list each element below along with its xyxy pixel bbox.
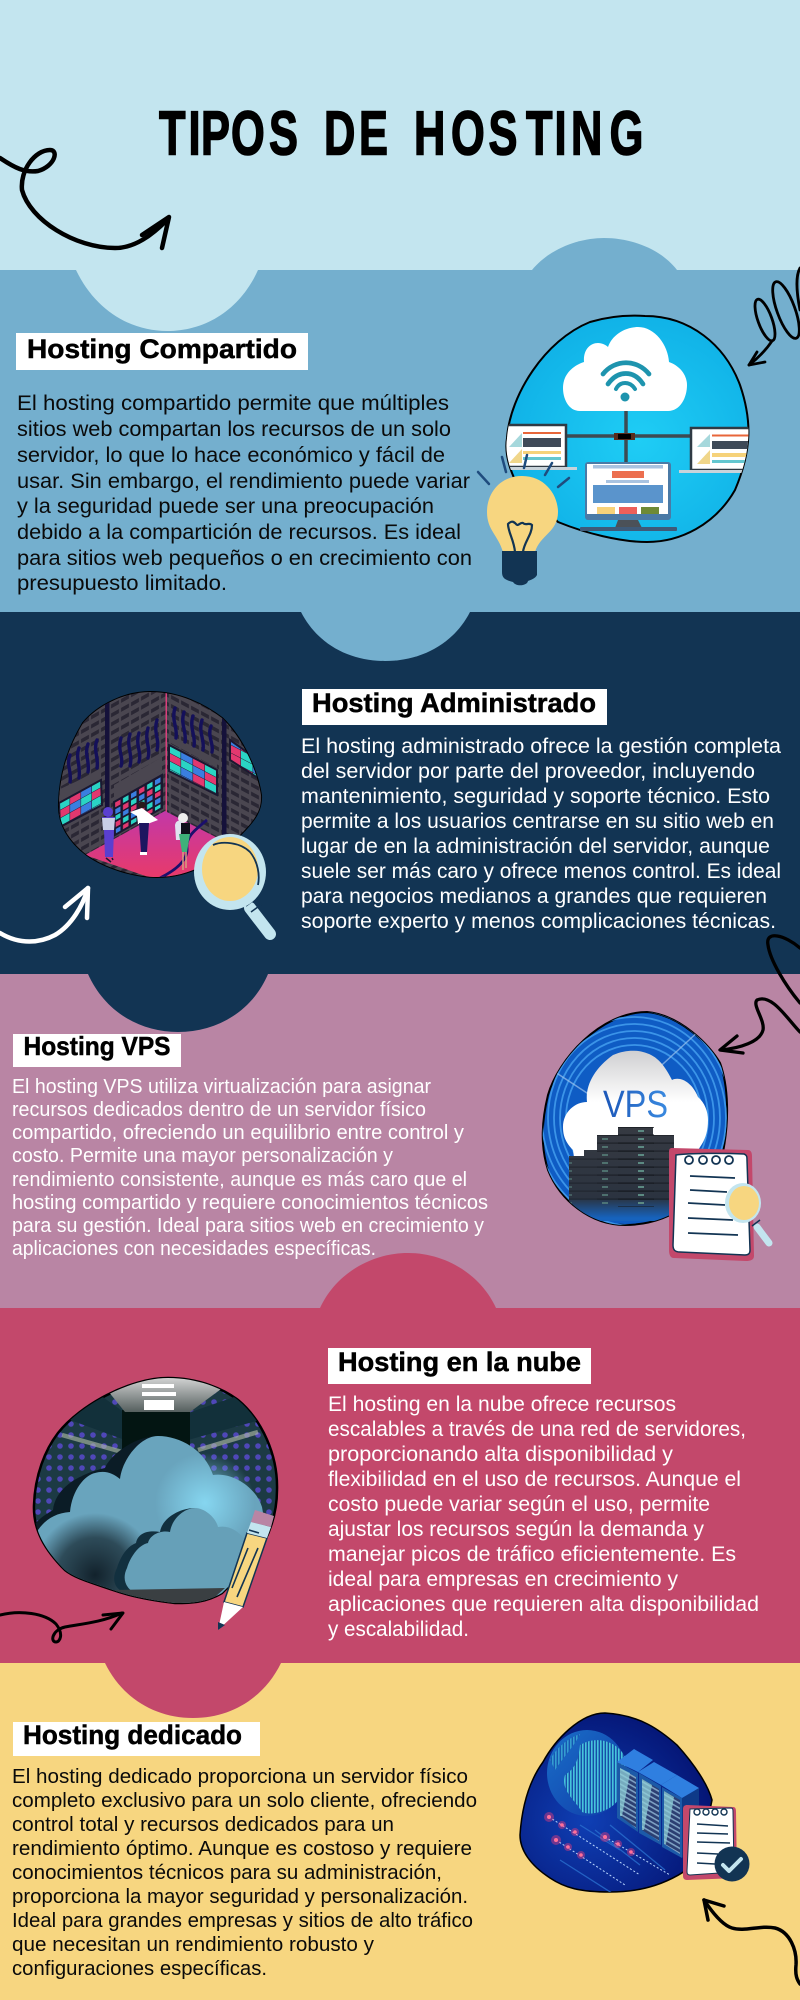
panel: hosting dedicado [12, 1713, 800, 1984]
icon: magnifying glass [194, 834, 270, 934]
text block: hosting administrado: para negocios medianos a grandes que requieren [301, 885, 767, 908]
laptop right [679, 428, 753, 473]
arrow: white curve [0, 888, 88, 942]
text block: hosting en la nube: y escalabilidad. [328, 1618, 469, 1641]
text block: hosting en la nube: ideal para empresas en crecimiento y [328, 1568, 678, 1591]
text block: hosting compartido: servidor, lo que lo hace económico y fácil de [17, 444, 445, 467]
wave bump: rose into yellow [105, 1663, 281, 1718]
monitor [580, 462, 677, 531]
heading: hosting vps: Hosting VPS [24, 1031, 170, 1061]
text block: hosting administrado: lugar de en la administración del servidor, aunque [301, 835, 770, 858]
illustration: globe and servers blob [520, 1713, 712, 1895]
text block: hosting vps: El hosting VPS utiliza virtualización para asignar [12, 1076, 431, 1098]
heading: hosting dedicado: Hosting dedicado [23, 1720, 242, 1750]
people [102, 802, 190, 870]
text block: hosting vps: compartido, ofreciendo un equilibrio entre control y [12, 1122, 464, 1144]
text block: hosting compartido: sitios web compartan los recursos de un solo [17, 418, 451, 441]
icon: notebook and magnifier [669, 1148, 769, 1261]
text block: hosting dedicado: configuraciones específicas. [12, 1957, 267, 1980]
text block: hosting dedicado [12, 1765, 477, 1980]
text block: hosting administrado: El hosting administrado ofrece la gestión completa [301, 735, 781, 758]
arrow: loop squiggle [0, 1613, 123, 1642]
text block: hosting compartido: para sitios web pequeños o en crecimiento con [17, 547, 472, 570]
text block: hosting en la nube: aplicaciones que requieren alta disponibilidad [328, 1593, 759, 1616]
text block: hosting en la nube [328, 1393, 759, 1641]
wave bump: light blue into blue [76, 270, 258, 331]
text block: hosting dedicado: Ideal para grandes empresas y sitios de alto tráfico [12, 1909, 473, 1932]
text block: hosting vps: para su gestión. Ideal para sitios web en crecimiento y [12, 1215, 484, 1237]
text block: hosting en la nube: ajustar los recursos según la demanda y [328, 1518, 704, 1541]
arrow: wavy squiggle to dedicated [704, 1900, 800, 1984]
text block: hosting administrado [301, 735, 781, 933]
illustration: cloud server room blob [28, 1375, 280, 1610]
title: TIPOS DE HOSTING [159, 100, 643, 168]
panel background: navy section [0, 612, 800, 974]
text block: hosting administrado: mantenimiento, seguridad y soporte técnico. Esto [301, 785, 770, 808]
icon: pencil [218, 1510, 274, 1630]
text block: hosting administrado: suele ser más caro y ofrece menos control. Es ideal [301, 860, 781, 883]
text block: hosting compartido: El hosting compartido permite que múltiples [17, 392, 449, 415]
text block: hosting dedicado: control total y recursos dedicados para un [12, 1813, 394, 1836]
wave bump: navy into mauve [88, 974, 268, 1032]
text block: hosting dedicado: rendimiento óptimo. Aunque es costoso y requiere [12, 1837, 472, 1860]
text block: hosting vps: hosting compartido y requiere conocimientos técnicos [12, 1192, 488, 1214]
text block: hosting compartido: debido a la compartición de recursos. Es ideal [17, 521, 461, 544]
text block: hosting dedicado: proporciona la mayor seguridad y personalización. [12, 1885, 468, 1908]
illustration: VPS cloud blob: VPS [603, 1084, 668, 1126]
panel: hosting compartido [16, 268, 800, 595]
text block: hosting en la nube: proporcionando alta disponibilidad y [328, 1443, 674, 1466]
panel background: mauve section [0, 974, 800, 1308]
heading: hosting en la nube: Hosting en la nube [338, 1347, 581, 1377]
text block: hosting dedicado: El hosting dedicado proporciona un servidor físico [12, 1765, 468, 1788]
laptop left [505, 425, 577, 470]
text block: hosting compartido: presupuesto limitado. [17, 572, 227, 595]
heading: hosting compartido: Hosting Compartido [27, 334, 297, 364]
text block: hosting vps: rendimiento consistente, aunque es más caro que el [12, 1169, 467, 1191]
text block: hosting administrado: del servidor por parte del proveedor, incluyendo [301, 760, 755, 783]
panel background: rose section [0, 1308, 800, 1663]
text block: hosting en la nube: El hosting en la nube ofrece recursos [328, 1393, 676, 1416]
text block: hosting administrado: soporte experto y menos complicaciones técnicas. [301, 910, 776, 933]
arrow: coiled squiggle [749, 268, 800, 365]
server towers [569, 1127, 674, 1221]
text block: hosting dedicado: completo exclusivo para un solo cliente, ofreciendo [12, 1789, 477, 1812]
text block: hosting compartido [17, 392, 472, 595]
text block: hosting vps: aplicaciones con necesidades específicas. [12, 1238, 376, 1260]
wave bump: blue into navy [301, 612, 470, 661]
panel background: blue section [0, 270, 800, 612]
arrow: header squiggle [0, 150, 169, 248]
text block: hosting vps [12, 1076, 488, 1260]
illustration: VPS cloud blob [536, 1010, 732, 1226]
text block: hosting vps: costo. Permite una mayor personalización y [12, 1145, 393, 1167]
panel: hosting en la nube [0, 1347, 759, 1642]
icon: light bulb [478, 455, 569, 585]
text block: hosting en la nube: manejar picos de tráfico eficientemente. Es [328, 1543, 736, 1566]
panel background: light blue header [0, 0, 800, 270]
text block: hosting en la nube: flexibilidad en el uso de recursos. Aunque el [328, 1468, 741, 1491]
text block: hosting dedicado: conocimientos técnicos para su administración, [12, 1861, 442, 1884]
text block: hosting dedicado: que necesitan un rendimiento robusto y [12, 1933, 375, 1956]
wave bump: blue into light blue [532, 238, 677, 270]
heading: hosting administrado: Hosting Administrado [312, 688, 596, 718]
illustration: cloud network blob [505, 316, 753, 542]
text block: hosting compartido: y la seguridad puede ser una preocupación [17, 495, 434, 518]
panel background: yellow section [0, 1663, 800, 2000]
illustration: server room blob [58, 690, 266, 880]
panel: hosting vps [12, 936, 800, 1261]
icon: notebook with check [683, 1805, 750, 1882]
text block: hosting vps: recursos dedicados dentro de un servidor físico [12, 1099, 426, 1121]
wave bump: rose into mauve [320, 1253, 496, 1308]
text block: hosting compartido: usar. Sin embargo, el rendimiento puede variar [17, 470, 470, 493]
arrow: wavy squiggle to VPS [720, 936, 800, 1053]
text block: hosting en la nube: escalables a través de una red de servidores, [328, 1418, 746, 1441]
text block: hosting administrado: permite a los usuarios centrarse en su sitio web en [301, 810, 774, 833]
text block: hosting en la nube: costo puede variar según el uso, permite [328, 1493, 710, 1516]
panel: hosting administrado [0, 688, 781, 942]
